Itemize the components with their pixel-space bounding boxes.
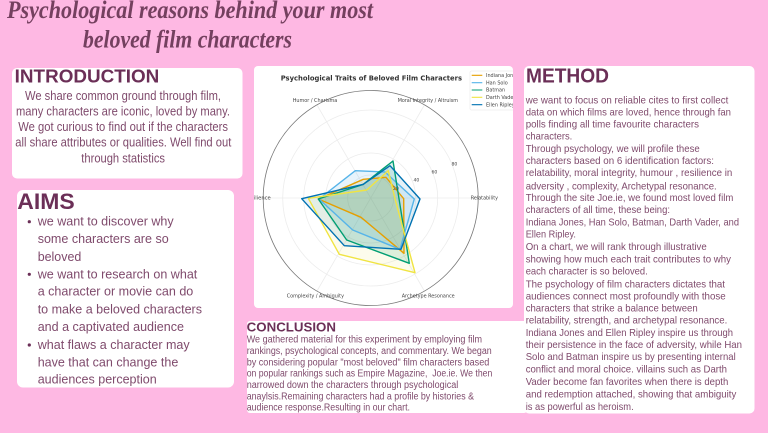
text block: aims bullet list: what flaws a character may bbox=[37, 337, 190, 352]
text block: aims bullet list: have that can change the bbox=[38, 354, 178, 369]
text block: conclusion body: by considering popular "most beloved" film characters based bbox=[247, 357, 489, 368]
panel: method bbox=[524, 65, 754, 413]
radar chart plot: 40 bbox=[414, 178, 419, 184]
text block: method body: data on which films are loved, hence through fan bbox=[526, 106, 731, 118]
text block: aims bullet list: some characters are so bbox=[38, 231, 169, 246]
text block: method body: characters. bbox=[526, 131, 572, 143]
radar chart plot: Humor / Charisma bbox=[293, 98, 337, 104]
text block: method body: relatability, moral integrity, humour , resilience in bbox=[526, 167, 732, 179]
text block: method body: relatability, strength, and archetypal resonance. bbox=[526, 315, 727, 327]
text block: method body: Indiana Jones and Ellen Ripley inspire us through bbox=[526, 327, 733, 339]
text block: introduction body: We share common ground through film, bbox=[25, 89, 221, 103]
chart legend bbox=[470, 70, 513, 110]
text block: conclusion body: narrowed down the characters through psychological bbox=[247, 380, 458, 391]
text block: method body: Vader become fan favorites when there is depth bbox=[526, 376, 728, 388]
text block: method body: Through psychology, we will profile these bbox=[526, 143, 700, 155]
text block: conclusion body: anaylsis.Remaining characters had a profile by histories & bbox=[247, 391, 474, 402]
radar chart plot: Relatability bbox=[471, 196, 498, 202]
text block: method body: characters of all time, these being: bbox=[526, 204, 670, 216]
radar chart plot: Moral Integrity / Altruism bbox=[398, 98, 458, 104]
text block: method body: conflict and moral choice. villains such as Darth bbox=[526, 363, 727, 375]
panel: introduction bbox=[12, 66, 242, 178]
text block: method body: showing how much each trait contributes to why bbox=[526, 253, 732, 265]
panel: radar chart bbox=[245, 66, 520, 308]
radar chart plot: 20 bbox=[393, 186, 399, 192]
text block: conclusion body: audience response.Resulting in our chart. bbox=[247, 403, 410, 414]
panel: conclusion bbox=[247, 320, 527, 414]
text block: method body: characters that strike a balance between bbox=[526, 303, 698, 315]
chart legend: Indiana Jones bbox=[486, 73, 519, 79]
text block: method body bbox=[525, 94, 742, 413]
text block: aims bullet list: we want to research on what bbox=[37, 266, 198, 281]
text block: method body: audiences connect most profoundly with those bbox=[526, 291, 726, 303]
chart legend: Batman bbox=[486, 88, 505, 94]
text block: method body: Indiana Jones, Han Solo, Batman, Darth Vader, and bbox=[526, 216, 739, 228]
text block: conclusion body: on popular rankings such as Empire Magazine, Joe.ie. We then bbox=[247, 369, 492, 380]
radar chart plot: 60 bbox=[432, 170, 437, 176]
text block: method body: The psychology of film characters dictates that bbox=[526, 278, 725, 290]
text block: aims bullet list bbox=[28, 214, 202, 387]
text block: introduction body: all share attributes or qualities. Well find out bbox=[15, 136, 232, 150]
text block: introduction body: many characters are iconic, loved by many. bbox=[16, 104, 230, 118]
text block: aims bullet list: and a captivated audience bbox=[38, 319, 184, 334]
heading: aims: AIMS bbox=[17, 189, 75, 214]
text block: aims bullet list: a character or movie can do bbox=[38, 284, 193, 299]
text block: method body: On a chart, we will rank through illustrative bbox=[526, 241, 707, 253]
text block: introduction body: through statistics bbox=[81, 152, 165, 166]
heading: conclusion: CONCLUSION bbox=[247, 320, 336, 335]
title: beloved film characters bbox=[83, 27, 292, 54]
text block: method body: Through the site Joe.ie, we found most loved film bbox=[526, 192, 734, 204]
text block: introduction body: We got curious to find out if the characters bbox=[18, 120, 228, 134]
text block: aims bullet list: we want to discover why bbox=[37, 214, 174, 229]
radar chart plot: Complexity / Ambiguity bbox=[287, 293, 344, 299]
heading: method: METHOD bbox=[526, 65, 609, 88]
chart legend: Han Solo bbox=[486, 80, 508, 86]
text block: aims bullet list: audiences perception bbox=[38, 372, 157, 387]
radar chart plot bbox=[245, 90, 498, 306]
radar chart plot: Resilience bbox=[245, 196, 271, 202]
text block: method body: adversity , complexity, Archetypal resonance. bbox=[526, 180, 717, 192]
text block: method body: their persistence in the face of adversity, while Han bbox=[526, 339, 742, 351]
title bbox=[6, 0, 374, 54]
chart legend: Darth Vader bbox=[486, 95, 516, 101]
chart legend: Ellen Ripley bbox=[486, 102, 515, 108]
text block: conclusion body bbox=[247, 335, 492, 414]
heading: introduction: INTRODUCTION bbox=[15, 66, 159, 87]
radar chart plot: Archetype Resonance bbox=[402, 293, 455, 299]
text block: method body: characters based on 6 identification factors: bbox=[526, 155, 714, 167]
text block: method body: Solo and Batman inspire us by presenting internal bbox=[526, 351, 736, 363]
text block: aims bullet list: to make a beloved characters bbox=[38, 302, 202, 317]
panel: aims bbox=[17, 189, 234, 388]
text block: conclusion body: We gathered material for this experiment by employing film bbox=[247, 335, 482, 346]
text block: method body: polls finding all time favourite characters bbox=[526, 119, 699, 131]
radar chart plot: 80 bbox=[452, 162, 457, 168]
text block: method body: is as powerful as heroism. bbox=[526, 401, 634, 413]
chart title: Psychological Traits of Beloved Film Characters bbox=[281, 74, 463, 83]
text block: method body: Ellen Ripley. bbox=[526, 229, 576, 241]
text block: method body: and redemption attached, showing that ambiguity bbox=[526, 389, 737, 401]
text block: method body: we want to focus on reliable cites to first collect bbox=[525, 94, 728, 106]
text block: introduction body bbox=[15, 89, 232, 166]
text block: aims bullet list: beloved bbox=[38, 249, 81, 264]
text block: conclusion body: rankings, psychological concepts, and commentary. We began bbox=[247, 346, 492, 357]
text block: method body: each character is so beloved. bbox=[526, 265, 648, 277]
